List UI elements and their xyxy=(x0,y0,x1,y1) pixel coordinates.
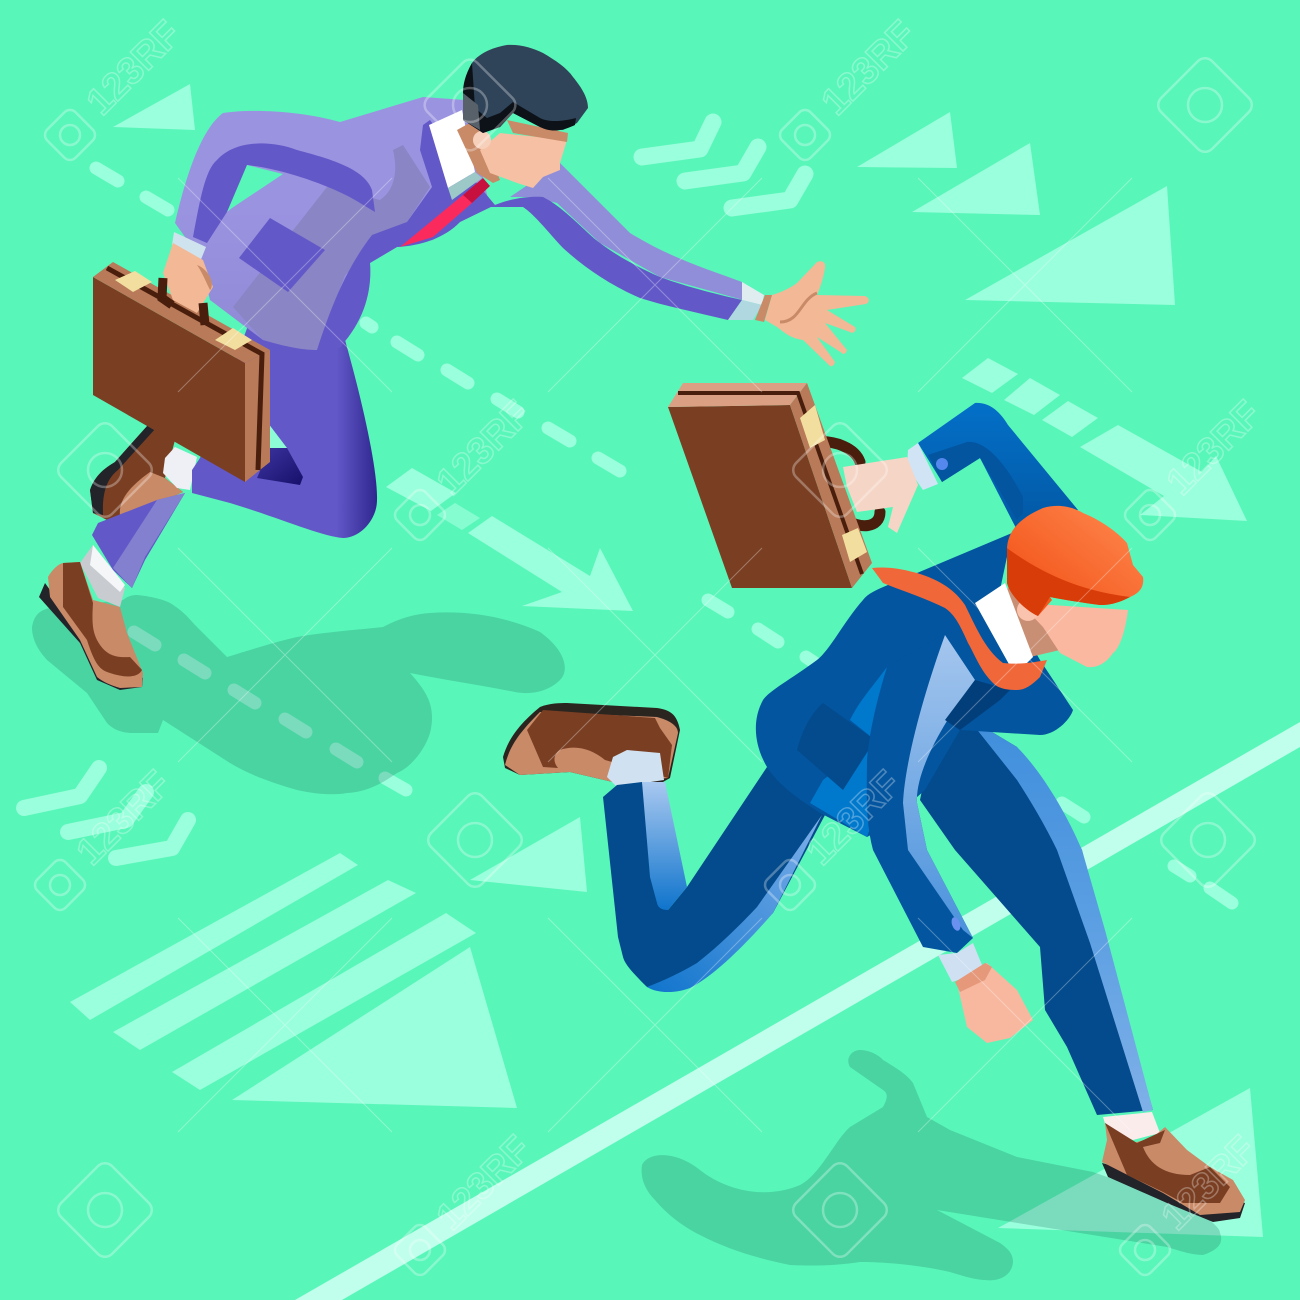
collar xyxy=(975,583,1033,675)
stamp xyxy=(42,13,189,163)
hand on handle xyxy=(162,243,213,325)
stamp: 123RF xyxy=(429,393,539,503)
stamp xyxy=(392,393,539,543)
stamp xyxy=(392,1128,539,1278)
stamp xyxy=(1117,1128,1264,1278)
hand xyxy=(843,457,918,533)
blue runner xyxy=(503,383,1245,1222)
rear shoe xyxy=(503,703,680,783)
stamp xyxy=(777,13,924,163)
stamp xyxy=(32,763,179,913)
front leg strip xyxy=(967,717,1153,1112)
stamp: 123RF xyxy=(1154,1128,1264,1238)
briefcase xyxy=(668,383,872,588)
stamp: 123RF xyxy=(799,763,909,873)
back arm inner xyxy=(193,143,375,243)
inner strip xyxy=(642,782,687,910)
tie xyxy=(400,178,490,247)
stamp: 123RF xyxy=(1159,393,1269,503)
rear arm xyxy=(907,403,1078,530)
lapel xyxy=(945,680,1010,730)
centre arrow xyxy=(386,468,633,611)
front shoe xyxy=(39,562,143,690)
stamp: 123RF xyxy=(814,13,924,123)
stamp xyxy=(789,1159,891,1261)
jacket xyxy=(172,97,495,351)
bars and triangle bottom left xyxy=(70,817,587,1108)
handle xyxy=(815,442,880,526)
rear sock xyxy=(607,750,664,787)
hair xyxy=(463,45,588,133)
finish line xyxy=(295,722,1300,1300)
stamp xyxy=(1154,54,1256,156)
rear shoe xyxy=(90,425,183,525)
stamp xyxy=(762,763,909,913)
lower sock xyxy=(80,545,125,607)
fist xyxy=(955,963,1033,1043)
cuff xyxy=(938,943,982,982)
trousers xyxy=(192,320,377,538)
stamp xyxy=(1157,789,1259,891)
rear sock xyxy=(163,447,197,490)
lower strip xyxy=(647,815,822,992)
purple runner xyxy=(39,45,869,690)
stamp xyxy=(421,56,519,154)
triangle markers top xyxy=(113,84,1175,305)
head xyxy=(457,45,588,188)
briefcase xyxy=(93,262,270,482)
stamp xyxy=(54,1159,156,1261)
front arm xyxy=(867,630,975,953)
chevrons bottom left xyxy=(24,768,188,858)
face xyxy=(1020,603,1128,667)
chevrons top xyxy=(642,122,805,208)
registration marks xyxy=(178,178,1132,1132)
triangle bottom right xyxy=(998,1088,1263,1237)
pocket xyxy=(797,703,875,790)
rear leg xyxy=(603,767,825,992)
shadow: blue runner xyxy=(642,1050,1221,1280)
ear xyxy=(1017,599,1039,621)
cuff xyxy=(172,232,206,262)
jacket dark side xyxy=(317,120,495,351)
lit panel xyxy=(810,667,887,837)
lower leg xyxy=(92,493,185,588)
dashed lane line xyxy=(96,168,1232,903)
gap behind briefcase xyxy=(268,423,287,448)
stamp xyxy=(54,419,156,521)
shadow: purple runner xyxy=(32,595,565,794)
stamp: 123RF xyxy=(79,13,189,123)
neck xyxy=(997,583,1060,657)
sleeve button xyxy=(950,916,962,932)
stamp xyxy=(424,789,526,891)
sock xyxy=(1103,1112,1160,1140)
gap between arm and body xyxy=(227,165,283,212)
stamp xyxy=(789,419,891,521)
reaching arm xyxy=(490,163,764,320)
jacket shadow xyxy=(233,145,430,350)
jacket xyxy=(756,533,1073,953)
stamp: 123RF xyxy=(69,763,179,873)
inner thigh shade xyxy=(257,448,303,485)
sleeve strip xyxy=(903,635,975,938)
right arrow and bars xyxy=(962,358,1247,521)
pocket xyxy=(239,218,325,292)
hair xyxy=(1007,506,1143,616)
tie xyxy=(872,567,1047,690)
cuff xyxy=(728,282,764,320)
front shoe xyxy=(1102,1123,1245,1222)
hand open xyxy=(755,261,869,366)
collar xyxy=(429,110,482,200)
cuff xyxy=(907,443,938,490)
front leg xyxy=(920,717,1153,1115)
stamp: 123RF xyxy=(429,1128,539,1238)
stamp xyxy=(1122,393,1269,543)
